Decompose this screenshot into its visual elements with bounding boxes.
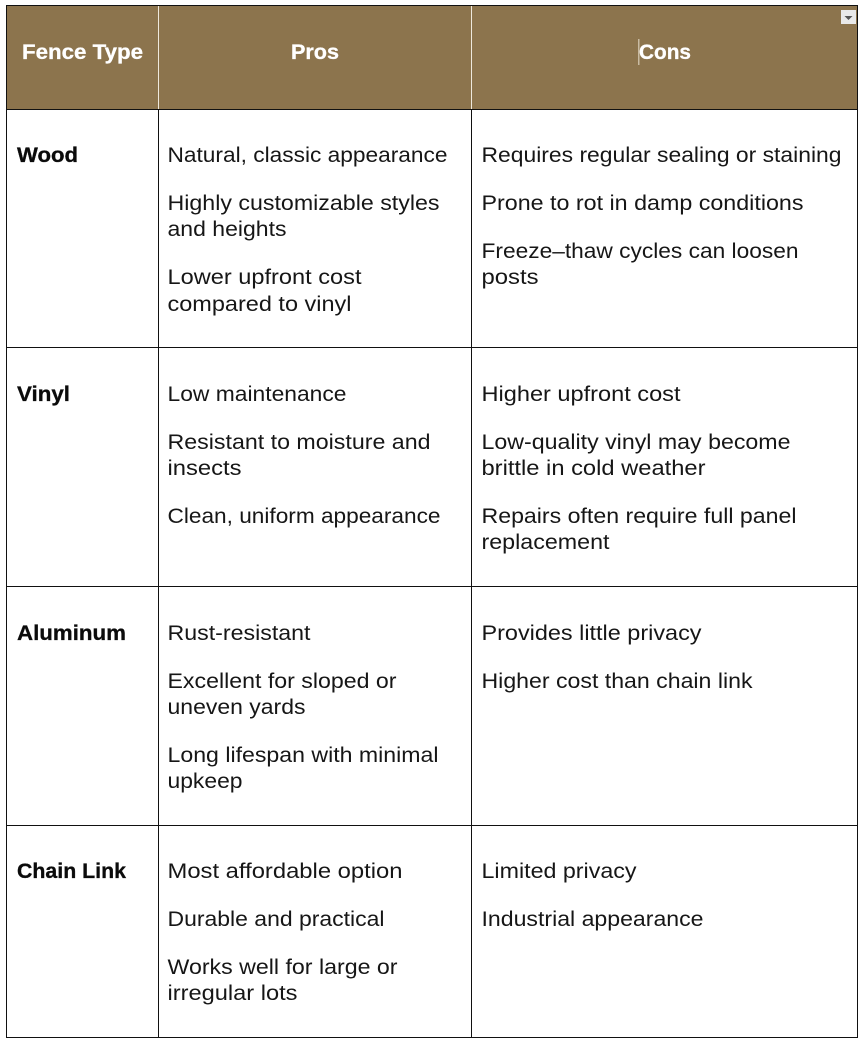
aluminum pros: uneven yards <box>168 695 306 719</box>
wood cons: Requires regular sealing or staining <box>482 143 842 167</box>
aluminum cons: Higher cost than chain link <box>482 669 753 693</box>
chain link cons: Limited privacy <box>482 859 637 883</box>
chain link pros: Most affordable option <box>168 859 402 883</box>
aluminum pros: upkeep <box>168 769 243 793</box>
chain link pros: irregular lots <box>168 981 298 1005</box>
vinyl pros <box>168 382 441 528</box>
heading: fence type: Fence Type <box>22 41 143 64</box>
label: aluminum: Aluminum <box>17 621 126 645</box>
aluminum pros <box>168 621 438 793</box>
vinyl cons: Low-quality vinyl may become <box>482 430 790 454</box>
chain link cons <box>482 859 704 931</box>
chain link pros: Works well for large or <box>168 955 398 979</box>
wood pros <box>168 143 448 316</box>
vinyl cons: replacement <box>482 530 610 554</box>
vinyl cons: brittle in cold weather <box>482 456 706 480</box>
wood cons: posts <box>482 265 538 289</box>
row: aluminum <box>17 621 753 793</box>
row: vinyl <box>17 382 796 554</box>
aluminum pros: Excellent for sloped or <box>168 669 396 693</box>
wood pros: Lower upfront cost <box>168 265 362 289</box>
header row <box>6 5 858 109</box>
heading: pros: Pros <box>291 41 339 64</box>
vinyl pros: insects <box>168 456 242 480</box>
chain link pros <box>168 859 402 1005</box>
wood pros: compared to vinyl <box>168 292 352 316</box>
row: chain link <box>17 859 704 1005</box>
heading: cons: Cons <box>639 41 691 64</box>
vinyl cons: Repairs often require full panel <box>482 504 796 528</box>
aluminum pros: Rust-resistant <box>168 621 311 645</box>
label: chain link: Chain Link <box>17 859 126 883</box>
wood cons: Prone to rot in damp conditions <box>482 191 804 215</box>
aluminum cons: Provides little privacy <box>482 621 702 645</box>
vinyl pros: Low maintenance <box>168 382 346 406</box>
wood cons: Freeze–thaw cycles can loosen <box>482 239 798 263</box>
vinyl cons <box>482 382 796 554</box>
label: vinyl: Vinyl <box>17 382 70 406</box>
vinyl cons: Higher upfront cost <box>482 382 681 406</box>
aluminum pros: Long lifespan with minimal <box>168 743 438 767</box>
vinyl pros: Resistant to moisture and <box>168 430 430 454</box>
wood cons <box>482 143 842 289</box>
wood pros: Highly customizable styles <box>168 191 440 215</box>
aluminum cons <box>482 621 753 693</box>
chain link pros: Durable and practical <box>168 907 384 931</box>
icon: dropdown button <box>841 10 856 24</box>
label: wood: Wood <box>17 143 78 167</box>
chain link cons: Industrial appearance <box>482 907 704 931</box>
wood pros: Natural, classic appearance <box>168 143 448 167</box>
vinyl pros: Clean, uniform appearance <box>168 504 441 528</box>
row: wood <box>17 143 842 316</box>
wood pros: and heights <box>168 217 286 241</box>
